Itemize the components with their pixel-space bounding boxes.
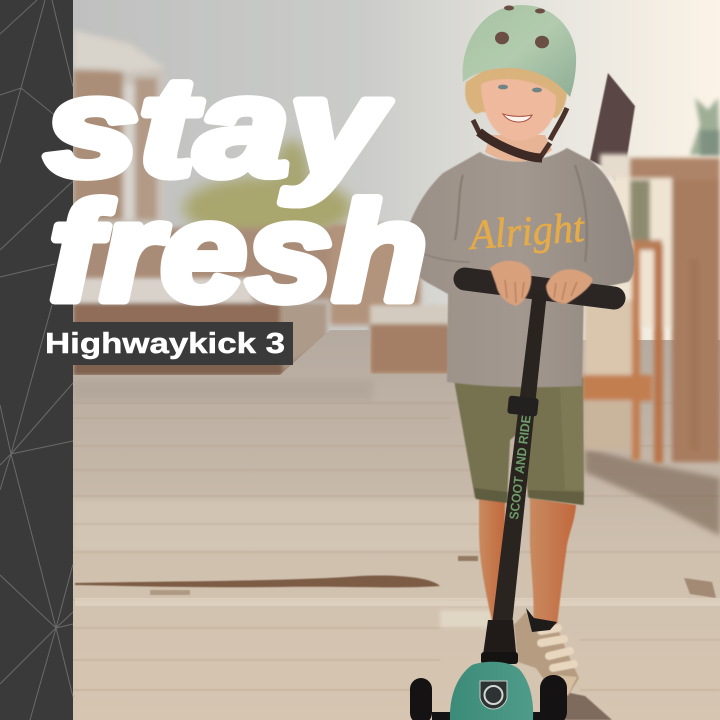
scooter handlebar xyxy=(465,279,614,298)
headline xyxy=(45,48,427,330)
folded umbrella xyxy=(590,73,635,215)
blurred wall behind the benches xyxy=(73,228,418,300)
wooden terrace structure at right xyxy=(582,154,720,463)
sandal xyxy=(514,612,579,696)
right leg xyxy=(530,498,576,625)
headline: stay xyxy=(45,48,390,205)
left leg xyxy=(479,498,505,625)
scooter teal deck xyxy=(450,662,533,720)
chin strap xyxy=(473,108,567,158)
scooter wheels xyxy=(410,675,567,720)
sweater xyxy=(404,148,635,387)
shorts xyxy=(454,378,584,505)
hands xyxy=(490,261,592,306)
sweater lettering: Alright xyxy=(466,205,587,259)
head xyxy=(465,66,567,158)
face xyxy=(481,79,556,141)
scooter stem xyxy=(492,290,547,625)
wooden deck xyxy=(73,330,720,720)
scooter emblem xyxy=(480,681,507,709)
smile xyxy=(503,114,532,122)
blurred building at left xyxy=(73,30,165,225)
shadow under the scooter xyxy=(560,692,612,720)
plant at top right xyxy=(690,98,720,156)
headline: fresh xyxy=(49,173,427,330)
product label xyxy=(45,322,293,365)
scooter neck and collar xyxy=(481,620,518,664)
product label: Highwaykick 3 xyxy=(45,328,285,360)
deck stains xyxy=(75,556,716,598)
blurred plant xyxy=(183,140,353,240)
side panel with geometric lines xyxy=(0,0,73,720)
box planter xyxy=(370,305,450,374)
bench at left xyxy=(73,278,327,376)
helmet xyxy=(463,5,576,97)
neck xyxy=(485,135,552,162)
light reflection patch xyxy=(440,610,500,628)
sock xyxy=(526,608,557,632)
shadow on the deck at right xyxy=(585,448,720,536)
stem lettering: SCOOT AND RIDE xyxy=(506,414,534,520)
eyes xyxy=(498,85,542,92)
hair xyxy=(465,66,567,118)
boy on scooter xyxy=(404,5,635,720)
